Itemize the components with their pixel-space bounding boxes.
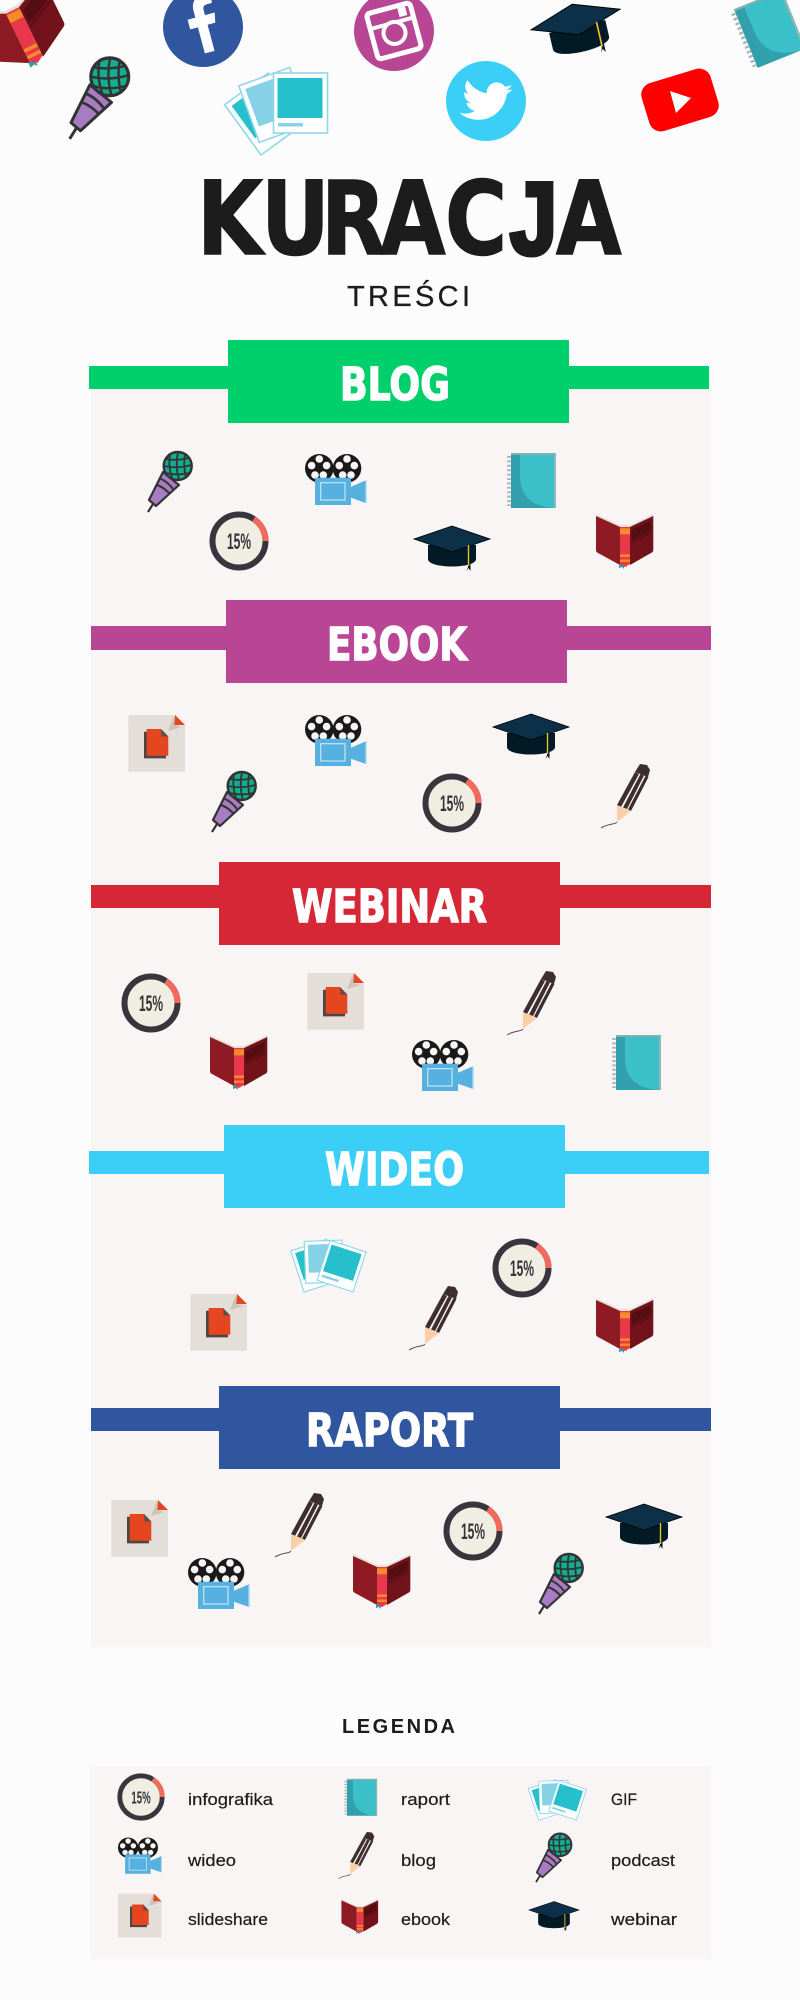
icon: film camera xyxy=(188,1558,250,1609)
icon: microphone xyxy=(539,1554,583,1614)
legend item: GIF: GIF xyxy=(611,1790,637,1809)
icon: 15% ring xyxy=(426,776,478,830)
icon: 15% ring: 15% xyxy=(139,991,163,1016)
legend heading: LEGENDA xyxy=(342,1716,455,1738)
section: webinar xyxy=(91,862,711,1091)
icon: 15% ring xyxy=(446,1504,500,1558)
icon: book xyxy=(596,514,653,569)
banner: raport: RAPORT xyxy=(306,1404,473,1457)
icon: microphone xyxy=(70,58,129,139)
icon: pencil xyxy=(409,1286,458,1350)
legend item: blog xyxy=(338,1832,436,1879)
icon: notebook xyxy=(732,0,800,69)
legend item: raport: raport xyxy=(401,1790,450,1809)
icon: pencil xyxy=(507,971,556,1035)
icon: book xyxy=(596,1298,653,1353)
section: blog xyxy=(89,340,709,571)
icon: slideshare xyxy=(307,973,364,1030)
icon: 15% ring: 15% xyxy=(440,791,464,816)
legend item: webinar: webinar xyxy=(610,1910,677,1929)
icon: book xyxy=(0,0,76,84)
icon: photos xyxy=(280,1226,367,1307)
subtitle: TREŚCI xyxy=(347,279,470,313)
icon: youtube xyxy=(638,66,722,134)
legend item: wideo xyxy=(118,1838,236,1874)
banner: webinar: WEBINAR xyxy=(292,880,487,933)
icon: film camera xyxy=(305,454,367,505)
legend item: wideo: wideo xyxy=(187,1851,236,1870)
legend item: blog: blog xyxy=(401,1851,436,1870)
icon: notebook xyxy=(614,1035,661,1090)
icon: 15% ring: 15% xyxy=(227,529,251,554)
icon: 15% ring: 15% xyxy=(510,1256,534,1281)
icon: microphone xyxy=(212,772,256,832)
legend item: infografika xyxy=(120,1776,274,1818)
banner: wideo: WIDEO xyxy=(325,1143,464,1196)
icon: pencil xyxy=(601,764,650,828)
icon: 15% ring: 15% xyxy=(461,1519,485,1544)
icon: graduation cap xyxy=(606,1504,682,1549)
icon: book xyxy=(210,1035,267,1090)
section: raport xyxy=(91,1386,711,1614)
banner: ebook: EBOOK xyxy=(327,618,469,671)
header icons xyxy=(0,0,800,155)
title: KURACJA xyxy=(197,160,622,279)
legend item: infografika: infografika xyxy=(188,1790,274,1809)
legend item: slideshare: slideshare xyxy=(188,1910,268,1929)
legend item: podcast: podcast xyxy=(611,1851,675,1870)
section: ebook xyxy=(91,600,711,832)
icon: slideshare xyxy=(111,1500,168,1557)
icon: twitter xyxy=(446,61,526,141)
legend item: raport xyxy=(346,1779,450,1816)
icon: 15% ring xyxy=(212,514,266,568)
icon: instagram xyxy=(354,0,434,71)
legend item: podcast xyxy=(536,1834,675,1882)
panel: legend xyxy=(90,1766,711,1959)
icon: 15% ring xyxy=(124,976,178,1030)
icon: graduation cap xyxy=(528,0,629,67)
banner: blog: BLOG xyxy=(340,358,450,411)
icon: notebook xyxy=(509,453,556,508)
content panel xyxy=(91,389,711,1647)
legend item: slideshare xyxy=(118,1894,268,1937)
legend item: GIF xyxy=(520,1769,637,1831)
icon: photos xyxy=(225,67,328,155)
icon: book xyxy=(353,1554,410,1609)
icon: slideshare xyxy=(128,715,185,772)
icon: microphone xyxy=(148,452,192,512)
banner: ebook xyxy=(91,600,711,683)
icon: film camera xyxy=(305,715,367,766)
icon: slideshare xyxy=(190,1294,247,1351)
section: wideo xyxy=(89,1125,709,1353)
banner: wideo xyxy=(89,1125,709,1208)
icon: pencil xyxy=(275,1493,324,1557)
banner: raport xyxy=(91,1386,711,1469)
legend item: ebook: ebook xyxy=(401,1910,451,1929)
icon: graduation cap xyxy=(493,714,569,759)
icon: film camera xyxy=(412,1040,474,1091)
legend item: infografika: 15% xyxy=(131,1787,151,1807)
icon: facebook xyxy=(163,0,243,67)
icon: graduation cap xyxy=(414,526,490,571)
legend item: webinar xyxy=(529,1901,677,1931)
banner: webinar xyxy=(91,862,711,945)
banner: blog xyxy=(89,340,709,423)
legend item: ebook xyxy=(341,1899,451,1934)
icon: 15% ring xyxy=(496,1242,548,1294)
